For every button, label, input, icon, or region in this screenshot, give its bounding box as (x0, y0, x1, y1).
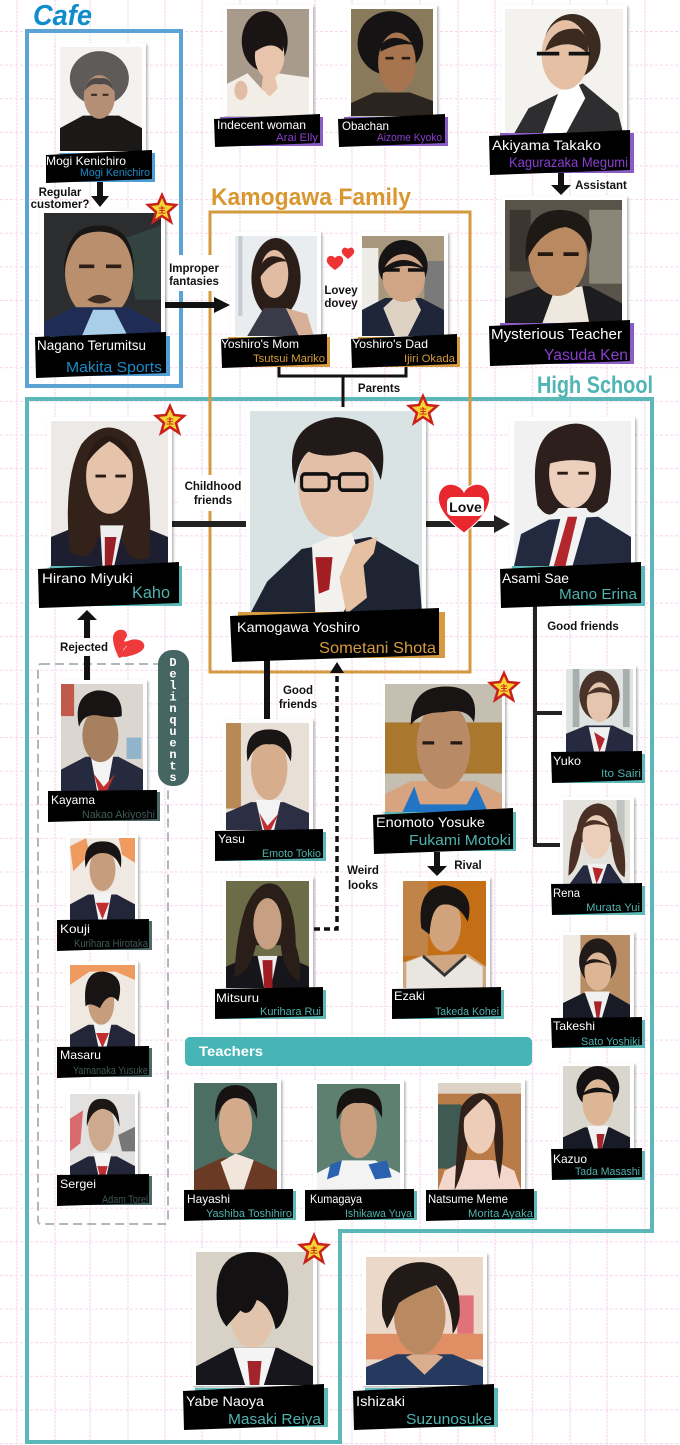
photo (366, 1257, 483, 1385)
name label: Yamanaka Yusuke (73, 1065, 148, 1077)
name label: Sometani Shota (319, 640, 436, 657)
name label: Ijiri Okada (404, 353, 456, 365)
name label (57, 919, 152, 951)
name label (338, 114, 448, 147)
photo (438, 1083, 521, 1190)
photo (563, 935, 630, 1018)
label: Assistant: Assistant (575, 180, 627, 192)
name label: Ito Sairi (601, 768, 641, 780)
name label (214, 114, 323, 147)
banner: Teachers (185, 1037, 532, 1066)
photo (403, 881, 486, 988)
label: Improper fantasies: fantasies (169, 276, 219, 288)
photo (70, 1094, 135, 1175)
star icon (300, 1235, 328, 1262)
photo (51, 421, 168, 566)
card: Akiyama Takako (489, 5, 634, 175)
star icon: 主 (419, 406, 427, 416)
card: Yoshiro's Dad (351, 232, 460, 368)
icon: love heart (438, 484, 490, 533)
label: Delinquents pill: u (169, 725, 177, 739)
name label: Sato Yoshiki (581, 1036, 640, 1048)
arrow: rejected (77, 610, 97, 680)
photo (351, 9, 433, 116)
icon: love heart: Love (449, 499, 482, 515)
label: Improper fantasies: Improper (169, 263, 219, 275)
name label (489, 130, 634, 175)
card: Yoshiro's Mom (221, 232, 330, 368)
star icon (409, 396, 437, 423)
label: Delinquents pill: i (169, 690, 177, 704)
card: Rena (551, 797, 645, 915)
arrow: improper fantasies (165, 297, 230, 313)
photo (60, 47, 142, 151)
name label: Kayama (51, 793, 95, 807)
name label (392, 987, 504, 1019)
star icon: 主 (310, 1245, 318, 1255)
name label (230, 608, 445, 662)
label: Delinquents pill: n (169, 702, 177, 716)
name label: Aizome Kyoko (377, 132, 442, 144)
name label: Kazuo (553, 1152, 587, 1166)
connector: Asami to Yuko and Rena (535, 606, 562, 845)
label: Lovey dovey: dovey (324, 298, 358, 310)
name label (38, 562, 182, 608)
banner: Teachers: Teachers (199, 1043, 263, 1059)
name label: Mitsuru (216, 991, 259, 1005)
photo (566, 669, 633, 752)
label: Delinquents pill: n (169, 748, 177, 762)
heading: High School: High School (537, 372, 653, 399)
name label (215, 829, 326, 861)
photo (514, 421, 631, 566)
panel: Kamogawa family box (210, 212, 470, 672)
star icon (156, 406, 184, 433)
card: Natsume Meme (426, 1079, 537, 1221)
label: Weird looks: Weird (347, 865, 379, 877)
label: Weird looks: looks (348, 880, 378, 892)
card: Kayama (48, 680, 160, 822)
name label: Asami Sae (502, 570, 569, 586)
name label: Tsutsui Mariko (253, 353, 325, 365)
card: Kouji (57, 835, 152, 951)
label: Childhood friends background (180, 475, 246, 511)
label: Improper fantasies background (166, 255, 220, 291)
name label (46, 150, 155, 183)
name label (351, 334, 460, 368)
label: Delinquents pill: t (169, 760, 177, 774)
arrow: love (426, 515, 510, 533)
photo (227, 9, 309, 116)
name label: Takeshi (553, 1019, 595, 1033)
photo (196, 1252, 313, 1385)
photo (235, 236, 317, 336)
name label: Akiyama Takako (492, 137, 601, 153)
photo (44, 213, 161, 337)
name label: Kurihara Rui (260, 1006, 321, 1018)
heading: Kamogawa Family: Kamogawa Family (211, 184, 412, 211)
card: Mysterious Teacher (489, 196, 634, 366)
name label (551, 1017, 645, 1048)
card: Takeshi (551, 932, 645, 1048)
name label: Kaho (132, 583, 170, 602)
name label: Fukami Motoki (409, 832, 511, 849)
photo (194, 1083, 277, 1190)
card: Enomoto Yosuke (373, 673, 518, 854)
name label: Masaru (60, 1048, 101, 1062)
card: Mitsuru (215, 877, 326, 1019)
photo (317, 1084, 400, 1190)
name label: Morita Ayaka (468, 1208, 534, 1220)
card: Yasu (215, 719, 326, 861)
connector: parents (279, 366, 406, 408)
name label (184, 1189, 296, 1221)
name label: Arai Elly (276, 132, 319, 144)
star icon: 主 (158, 205, 166, 215)
label: Lovey dovey: Lovey (324, 285, 358, 297)
arrow: regular customer (91, 180, 109, 207)
card: Masaru (57, 961, 152, 1078)
name label: Kurihara Hirotaka (74, 938, 149, 950)
label: Parents: Parents (358, 383, 400, 395)
name label: Tada Masashi (575, 1166, 640, 1178)
photo (70, 838, 135, 920)
photo (250, 411, 422, 612)
name label: Rena (553, 886, 580, 900)
connector: childhood friends (172, 521, 246, 527)
label: Regular customer: customer? (31, 199, 89, 211)
name label: Adam Torel (102, 1194, 148, 1206)
card: Kamogawa Yoshiro (230, 396, 445, 662)
name label: Hayashi (187, 1192, 230, 1206)
heading: Cafe: Cafe (33, 0, 92, 32)
card: Ishizaki (353, 1253, 498, 1430)
label: Childhood friends: friends (194, 495, 232, 507)
name label (373, 808, 516, 854)
name label (215, 987, 326, 1019)
name label: Yuko (553, 754, 581, 768)
name label: Yasuda Ken (544, 347, 628, 364)
name label (500, 562, 645, 608)
star icon: 主 (500, 683, 508, 693)
name label: Suzunosuke (406, 1411, 492, 1428)
arrow: assistant (551, 172, 571, 195)
name label (57, 1174, 152, 1206)
photo (563, 800, 630, 884)
label: Good friends (Yasu): friends (279, 699, 317, 711)
name label (305, 1189, 417, 1221)
photo (505, 200, 622, 323)
name label: Ishikawa Yuya (345, 1208, 413, 1220)
name label: Mano Erina (559, 586, 638, 603)
card: Mogi Kenichiro (46, 43, 155, 183)
name label (183, 1384, 328, 1430)
name label: Emoto Tokio (262, 848, 321, 860)
name label: Hirano Miyuki (42, 570, 133, 586)
name label: Yabe Naoya (186, 1393, 264, 1409)
name label: Mogi Kenichiro (80, 167, 150, 179)
card: Hirano Miyuki (38, 406, 184, 608)
star icon (490, 673, 518, 700)
name label: Yoshiro's Dad (352, 337, 428, 351)
photo (362, 236, 444, 336)
card: Obachan (338, 5, 448, 147)
card: Ezaki (392, 877, 504, 1019)
name label: Yoshiro's Mom (221, 337, 299, 351)
name label (551, 1148, 645, 1180)
arrow: weird looks dashed (314, 662, 344, 929)
name label (48, 790, 160, 822)
panel: delinquents dashed box (38, 664, 168, 1224)
label: Delinquents pill: D (169, 656, 177, 670)
name label (353, 1384, 498, 1430)
name label: Murata Yui (586, 902, 640, 914)
name label: Nakao Akiyoshi (82, 809, 155, 821)
name label: Ishizaki (356, 1393, 405, 1409)
label: Regular customer: Regular (39, 187, 81, 199)
name label (426, 1189, 537, 1221)
name label: Kumagaya (310, 1192, 362, 1206)
card: Yuko (551, 666, 645, 783)
panel: high school box (27, 399, 652, 1442)
card: Yabe Naoya (183, 1235, 328, 1430)
name label: Masaki Reiya (228, 1411, 322, 1428)
arrow: rival (427, 852, 447, 876)
name label (489, 320, 634, 366)
photo (505, 9, 623, 133)
name label: Mogi Kenichiro (46, 154, 126, 168)
connector: good friends (Yasu) (264, 660, 270, 720)
star icon: 主 (166, 416, 174, 426)
panel: cafe box (27, 31, 181, 386)
photo (385, 684, 502, 812)
name label: Kamogawa Yoshiro (237, 619, 360, 635)
name label (551, 883, 645, 915)
name label: Takeda Kohei (435, 1006, 499, 1018)
name label: Mysterious Teacher (491, 326, 622, 343)
name label: Kouji (60, 922, 90, 936)
name label: Enomoto Yosuke (376, 814, 485, 830)
name label (57, 1046, 152, 1078)
label: Delinquents pill: l (169, 679, 177, 693)
label: Rejected: Rejected (60, 642, 108, 654)
icon: broken heart (113, 630, 144, 658)
name label (221, 334, 330, 368)
label: Delinquents pill: e (169, 668, 177, 682)
icon: hearts (327, 248, 354, 270)
name label: Kagurazaka Megumi (509, 154, 628, 170)
photo (226, 881, 309, 988)
name label: Sergei (60, 1177, 96, 1191)
name label: Yashiba Toshihiro (206, 1208, 292, 1220)
name label: Natsume Meme (428, 1192, 508, 1206)
name label (35, 332, 170, 378)
photo (70, 965, 135, 1047)
photo (563, 1066, 630, 1149)
card: Hayashi (184, 1079, 296, 1221)
name label: Nagano Terumitsu (37, 337, 146, 353)
star icon (148, 195, 176, 222)
label: Delinquents pill: s (169, 771, 177, 785)
card: Nagano Terumitsu (35, 195, 176, 378)
label: Childhood friends: Childhood (185, 481, 241, 493)
card: Sergei (57, 1090, 152, 1206)
name label (551, 751, 645, 783)
name label: Yasu (218, 832, 245, 846)
card: Kumagaya (305, 1080, 417, 1221)
photo (61, 684, 143, 791)
card: Asami Sae (500, 417, 645, 608)
name label: Indecent woman (217, 118, 306, 132)
name label: Makita Sports (66, 359, 162, 376)
name label: Ezaki (394, 989, 425, 1003)
photo (226, 723, 309, 830)
card: Kazuo (551, 1063, 645, 1180)
name label: Obachan (342, 119, 389, 133)
label: Good friends (Asami): Good friends (547, 621, 619, 633)
label: Rival: Rival (454, 860, 482, 872)
label: Delinquents pill: q (169, 714, 177, 728)
card: Indecent woman (214, 5, 323, 147)
label: Delinquents pill: e (169, 736, 177, 750)
label: Good friends (Yasu): Good (283, 685, 313, 697)
label: Delinquents pill (158, 650, 189, 786)
